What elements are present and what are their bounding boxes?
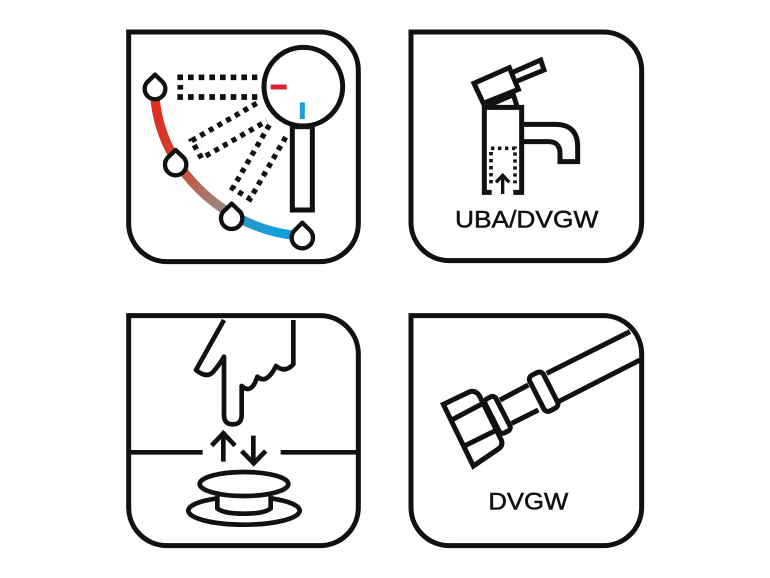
hose tube: [547, 332, 640, 402]
panel: temperature shower handle: [129, 32, 358, 262]
nut: [443, 391, 502, 466]
panel: faucet UBA/DVGW: [411, 32, 642, 261]
dotted spray: horizontal: [177, 77, 257, 97]
arrow down: [242, 436, 266, 463]
panel frame: [411, 316, 642, 546]
panel: push-open drain valve: [129, 316, 358, 546]
shower head: [264, 47, 343, 126]
faucet body: [484, 107, 522, 192]
water drop 3: [221, 204, 242, 229]
panel frame: [411, 32, 642, 261]
drain cap: [200, 472, 288, 496]
water drop 1: [145, 75, 165, 99]
middle tube: [500, 385, 538, 423]
dotted cartridge: [491, 148, 515, 183]
panel: hose DVGW: [411, 316, 642, 546]
faucet lever: [474, 60, 544, 107]
water drop 2: [165, 150, 186, 175]
panel frame: [129, 32, 358, 262]
arrow up: [212, 433, 235, 462]
temperature gradient arc: [155, 98, 302, 236]
hose collar: [528, 370, 560, 413]
blue cold marker: [295, 102, 310, 119]
label: UBA/DVGW: [455, 206, 599, 233]
basin line: [131, 445, 357, 459]
faucet spout: [522, 124, 578, 162]
water drop 4: [292, 223, 313, 248]
label: DVGW: [488, 488, 569, 515]
drain stem: [217, 496, 271, 514]
flow arrow: [496, 175, 509, 194]
panel frame: [129, 316, 358, 546]
dotted spray: upper diagonal: [192, 103, 267, 158]
shower handle: [292, 127, 312, 210]
red hot marker: [271, 79, 287, 94]
dotted spray: lower diagonal: [233, 125, 287, 199]
nut collar: [484, 395, 512, 435]
drain flange: [188, 497, 300, 525]
pointing hand: [196, 320, 293, 424]
